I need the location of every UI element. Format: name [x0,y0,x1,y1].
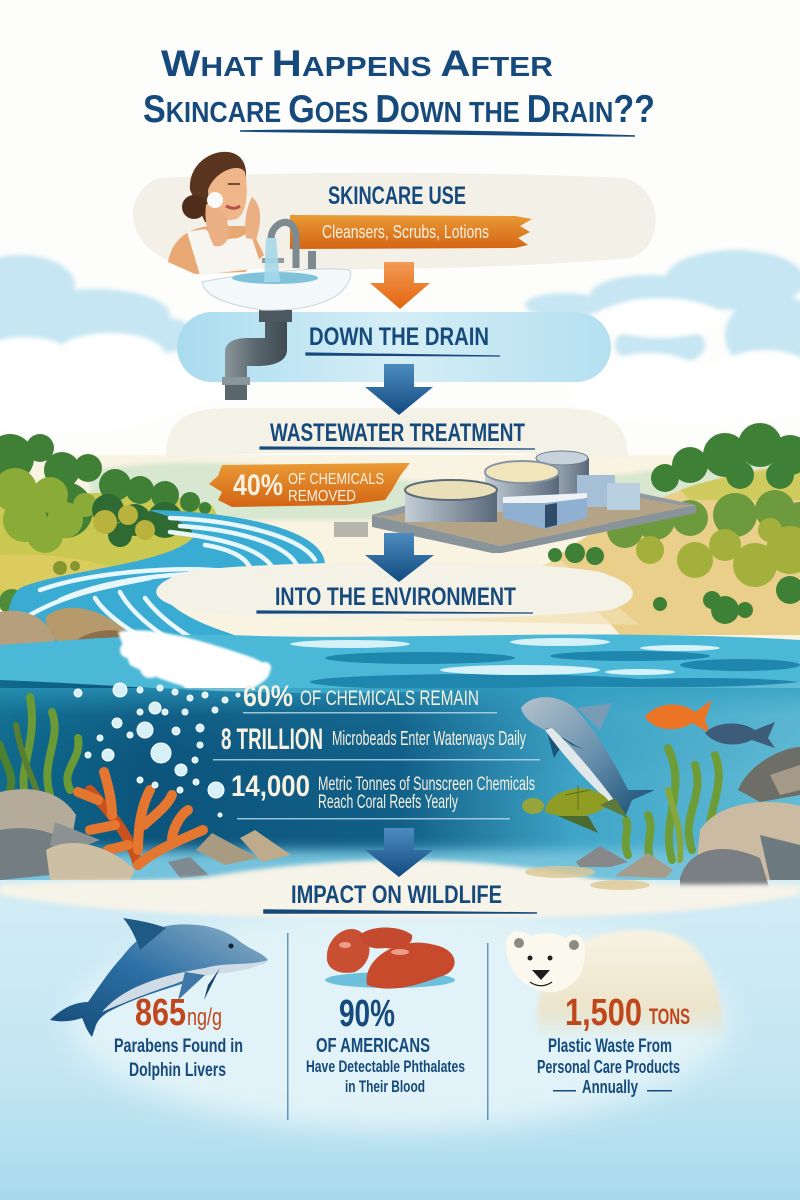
panel: wastewater treatment [166,408,628,507]
arrow: to impact [365,828,433,877]
shoulders and arms [168,226,264,274]
column: dolphin livers [50,918,268,1081]
caption: Plastic Waste From [548,1036,672,1057]
hair [190,152,246,225]
rocks left [0,789,291,880]
sky with clouds [0,250,800,433]
illustration: sink and pipe [202,222,351,400]
arrow: orange [370,262,430,309]
illustration: woman washing face [168,152,264,275]
panel: into the environment [156,562,633,619]
impact heading: IMPACT ON WILDLIFE [291,881,502,909]
underline [257,611,533,613]
stat: 8 trillion: 8 TRILLION [221,723,323,756]
bottom panel background [0,880,800,1200]
hands [205,203,229,246]
stat: 865 ng/g: 865 [135,992,186,1034]
rocks right [576,747,800,890]
river [0,510,325,665]
cotton pad [207,192,223,208]
stat: 1,500 tons: 1,500 [565,992,642,1034]
sand of impact section [0,860,800,918]
stat: 60 percent: 60% [243,680,293,713]
coral [78,772,203,865]
tank middle [485,472,559,512]
turtle [522,785,628,833]
orange callout: 40 percent: 40% [233,469,283,502]
illustration: polar bear [506,930,725,1040]
caption: Dolphin Livers [129,1060,226,1081]
underwater background [0,680,800,900]
caption [306,1035,465,1096]
title line two: SKINCARE GOES DOWN THE DRAIN?? [143,88,655,131]
heading: skincare use: SKINCARE USE [328,182,466,210]
stat: 60 percent [243,680,479,713]
stat: 865 ng/g: ng/g [187,1004,222,1031]
running water [264,238,280,282]
underline [306,353,500,356]
heading: wastewater treatment: WASTEWATER TREATMENT [270,419,525,447]
stat: 14,000 [231,770,535,813]
seaweed left [0,697,78,795]
stat: 14,000: Metric Tonnes of Sunscreen Chemicals [318,774,535,795]
caption: Personal Care Products [537,1057,680,1077]
orange fish [645,700,712,733]
orange callout: 40 percent: OF CHEMICALS [288,471,384,488]
basin [202,269,351,310]
arrow: to wastewater [365,364,433,415]
caption: Have Detectable Phthalates [306,1057,465,1076]
main building [503,493,587,529]
caption: OF AMERICANS [316,1035,430,1057]
title underline [240,130,635,136]
tank front [405,490,497,522]
faucet [271,222,296,268]
distant hills and land [0,440,800,640]
small grey patch [334,522,368,537]
heading: into the environment: INTO THE ENVIRONMENT [275,583,516,611]
panel: skincare use [133,173,656,269]
water surface [0,630,800,700]
caption: Parabens Found in [114,1036,243,1057]
caption [537,1036,680,1097]
face [208,168,247,220]
title [143,43,655,136]
right trees [548,423,800,624]
caption: in Their Blood [345,1077,425,1096]
stat: 14,000: 14,000 [231,770,310,803]
banner text: Cleansers, Scrubs, Lotions [322,222,489,242]
rocks by the river [0,608,125,651]
stat: 8 trillion: Microbeads Enter Waterways Daily [332,728,526,750]
seaweed right [626,748,719,860]
column: plastic waste [506,930,725,1097]
title line one: WHAT HAPPENS AFTER [161,43,553,84]
stat: 60 percent: OF CHEMICALS REMAIN [300,687,479,710]
divider [287,933,288,1120]
statistics block [213,680,540,820]
stat: 14,000: Reach Coral Reefs Yearly [318,792,458,813]
left trees [0,434,211,619]
column: phthalates [306,928,465,1096]
heading: down the drain: DOWN THE DRAIN [309,323,489,351]
illustration: treatment plant [372,451,696,553]
orange brush banner [290,215,532,249]
underline [260,447,535,449]
tank right back [536,458,589,496]
orange callout: 40 percent: REMOVED [288,488,356,505]
underline [264,910,537,913]
side building [577,475,615,507]
stat: 1,500 tons: TONS [649,1004,690,1029]
bubbles [74,683,240,817]
stat: 8 trillion [221,723,526,756]
arrow: to environment [365,533,434,582]
panel: down the drain [177,312,611,382]
underwater dolphin [521,697,655,817]
illustration: dolphin [50,918,268,1037]
caption [114,1036,243,1081]
illustration: livers [325,928,455,989]
orange callout: 40 percent [209,463,410,507]
pipe [222,310,292,400]
stat: 90 percent: 90% [339,993,395,1035]
caption: Annually [582,1077,638,1097]
divider [487,943,488,1120]
dark fish [705,722,775,748]
